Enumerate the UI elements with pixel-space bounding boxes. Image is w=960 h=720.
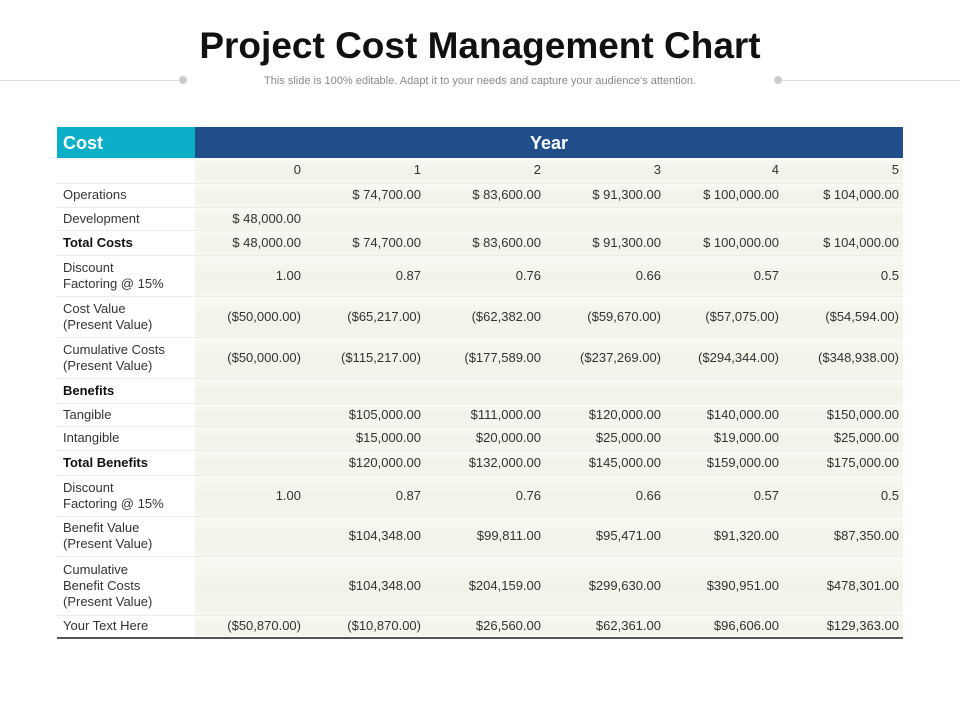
table: project costs: $111,000.00: [471, 406, 541, 422]
table: project costs: 0: [294, 162, 301, 177]
table: project costs: $87,350.00: [834, 528, 899, 543]
table: project costs: ($115,217.00): [341, 350, 421, 364]
table: project costs: $ 91,300.00: [592, 187, 661, 202]
table: project costs: $299,630.00: [589, 578, 661, 592]
table: project costs: 0.87: [396, 488, 421, 502]
table: project costs: $15,000.00: [356, 430, 421, 445]
table: project costs: Development: [63, 210, 140, 226]
table: project costs: $ 74,700.00: [352, 234, 421, 250]
subtitle: This slide is 100% editable. Adapt it to your needs and capture your audience's attention.: [264, 75, 696, 87]
table: project costs: $105,000.00: [349, 406, 421, 422]
table: project costs: $25,000.00: [834, 430, 899, 445]
table: project costs: ($50,000.00): [227, 350, 301, 364]
table: project costs: [57, 127, 903, 639]
table: project costs: ($10,870.00): [347, 618, 421, 633]
table: project costs: $175,000.00: [827, 454, 899, 470]
table: project costs: $129,363.00: [827, 618, 899, 633]
table: project costs: $99,811.00: [477, 528, 541, 543]
table: project costs: $120,000.00: [589, 406, 661, 422]
table: project costs: 0.76: [516, 488, 541, 502]
table: project costs: $159,000.00: [707, 454, 779, 470]
table: project costs: 0.66: [636, 268, 661, 282]
table: project costs: $ 100,000.00: [703, 234, 779, 250]
table: project costs: Factoring @ 15%: [63, 496, 164, 510]
table: project costs: $62,361.00: [596, 618, 661, 633]
table: project costs: $150,000.00: [827, 406, 899, 422]
table: project costs: Discount: [63, 260, 114, 274]
title: Project Cost Management Chart: [199, 25, 761, 66]
table: project costs: Total Costs: [63, 234, 133, 250]
table: project costs: ($62,382.00: [472, 308, 541, 324]
table: project costs: Cumulative: [63, 562, 128, 576]
table: project costs: (Present Value): [63, 316, 152, 332]
table: project costs: $390,951.00: [707, 578, 779, 592]
table: project costs: $140,000.00: [707, 406, 779, 422]
table: project costs: ($50,870.00): [227, 618, 301, 633]
table: project costs: $19,000.00: [714, 430, 779, 445]
table: project costs: $ 48,000.00: [232, 234, 301, 250]
table: project costs: Total Benefits: [63, 454, 148, 470]
table: project costs: $25,000.00: [596, 430, 661, 445]
table: project costs: Benefit Costs: [63, 578, 140, 592]
table: project costs: 0.5: [881, 488, 899, 502]
table: project costs: 1: [414, 162, 421, 177]
table: project costs: 5: [892, 162, 899, 177]
table: project costs: ($237,269.00): [580, 350, 661, 364]
table: project costs: ($57,075.00): [705, 308, 779, 324]
table: project costs: $104,348.00: [349, 578, 421, 592]
table: project costs: 0.57: [754, 488, 779, 502]
table: project costs: $145,000.00: [589, 454, 661, 470]
table: project costs: (Present Value): [63, 536, 152, 551]
table: project costs: 4: [772, 162, 779, 177]
table: project costs: $95,471.00: [596, 528, 661, 543]
table: project costs: 3: [654, 162, 661, 177]
table: project costs: $132,000.00: [469, 454, 541, 470]
table: project costs: (Present Value): [63, 358, 152, 372]
table: project costs: Benefits: [63, 382, 114, 398]
table: project costs: $ 104,000.00: [823, 187, 899, 202]
table: project costs: $26,560.00: [476, 618, 541, 633]
table: project costs: $478,301.00: [827, 578, 899, 592]
table: project costs: (Present Value): [63, 594, 152, 608]
table: project costs: Tangible: [63, 406, 111, 422]
table: project costs: $ 48,000.00: [232, 210, 301, 226]
table: project costs: Cost Value: [63, 300, 126, 316]
table: project costs: Year: [530, 132, 568, 152]
table: project costs: $ 100,000.00: [703, 187, 779, 202]
table: project costs: 1.00: [276, 488, 301, 502]
table: project costs: $104,348.00: [349, 528, 421, 543]
table: project costs: 0.66: [636, 488, 661, 502]
table: project costs: $ 91,300.00: [592, 234, 661, 250]
table: project costs: ($50,000.00): [227, 308, 301, 324]
table: project costs: $ 74,700.00: [352, 187, 421, 202]
table: project costs: 0.87: [396, 268, 421, 282]
table: project costs: $204,159.00: [469, 578, 541, 592]
table: project costs: 0.76: [516, 268, 541, 282]
table: project costs: Factoring @ 15%: [63, 276, 164, 290]
table: project costs: ($65,217.00): [347, 308, 421, 324]
table: project costs: Your Text Here: [63, 618, 148, 633]
table: project costs: 0.5: [881, 268, 899, 282]
table: project costs: ($59,670.00): [587, 308, 661, 324]
table: project costs: Cost: [63, 132, 103, 152]
table: project costs: 2: [534, 162, 541, 177]
table: project costs: $91,320.00: [714, 528, 779, 543]
table: project costs: $96,606.00: [714, 618, 779, 633]
table: project costs: $ 104,000.00: [823, 234, 899, 250]
table: project costs: $ 83,600.00: [472, 187, 541, 202]
table: project costs: ($54,594.00): [825, 308, 899, 324]
table: project costs: Discount: [63, 480, 114, 494]
table: project costs: $20,000.00: [476, 430, 541, 445]
table: project costs: ($348,938.00): [818, 350, 899, 364]
table: project costs: ($177,589.00: [464, 350, 541, 364]
table: project costs: 0.57: [754, 268, 779, 282]
table: project costs: $ 83,600.00: [472, 234, 541, 250]
table: project costs: ($294,344.00): [698, 350, 779, 364]
table: project costs: Cumulative Costs: [63, 342, 165, 356]
table: project costs: Operations: [63, 187, 127, 202]
table: project costs: 1.00: [276, 268, 301, 282]
table: project costs: $120,000.00: [349, 454, 421, 470]
table: project costs: Benefit Value: [63, 520, 139, 535]
table: project costs: Intangible: [63, 430, 119, 445]
